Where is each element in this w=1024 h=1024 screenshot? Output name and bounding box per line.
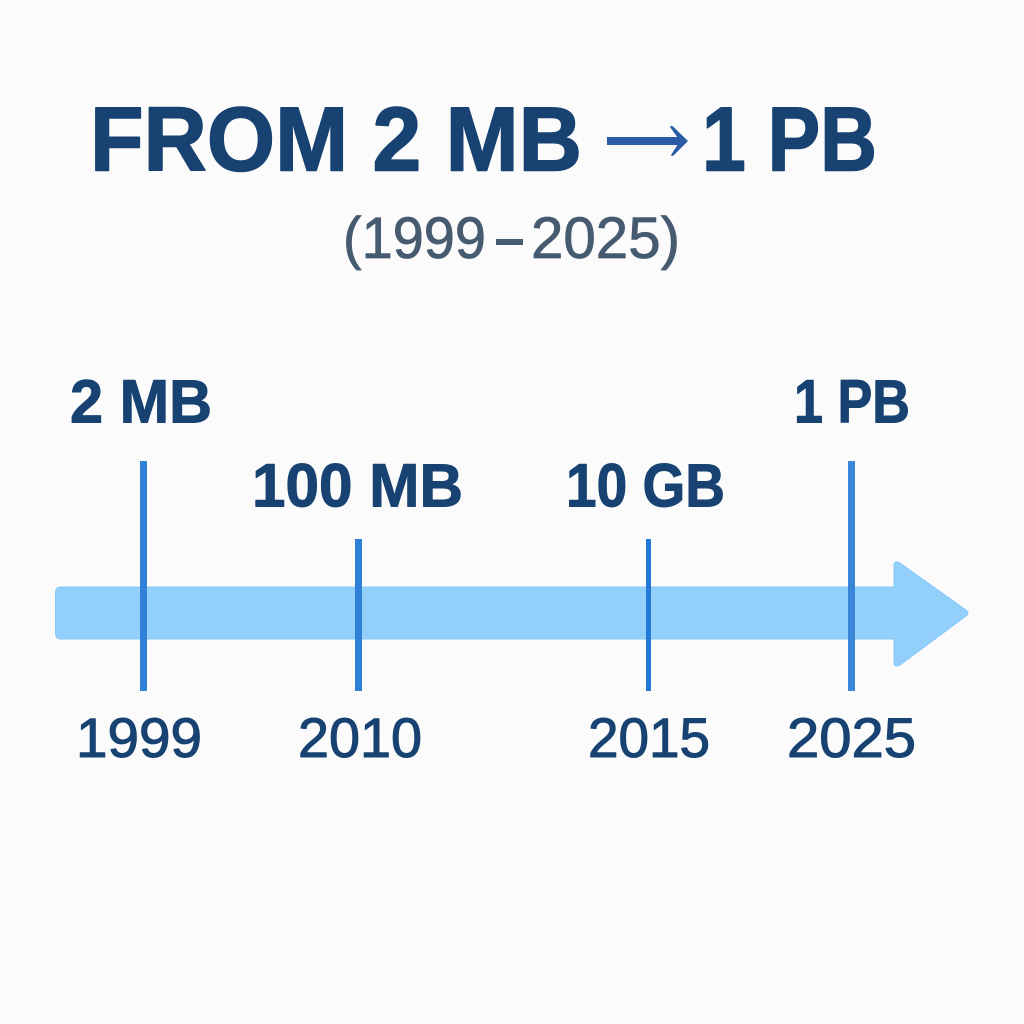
timeline arrow (56, 562, 968, 666)
tick: 2010 (355, 539, 362, 691)
subtitle (343, 206, 680, 271)
year label: 2025: 2025 (787, 706, 916, 769)
year label: 2010: 2010 (298, 706, 422, 769)
year label: 1999: 1999 (76, 706, 202, 769)
value label: 2 MB: 2 MB (70, 368, 212, 436)
year label: 2015: 2015 (588, 706, 710, 769)
tick: 2025 (848, 461, 855, 691)
title text: from: FROM 2 MB (90, 90, 582, 190)
milestone: 2025 (787, 368, 916, 769)
milestone: 2015 (566, 452, 725, 769)
tick: 2015 (646, 539, 651, 691)
title text: to: 1 PB (702, 90, 877, 190)
subtitle: (1999 (343, 206, 486, 271)
title (90, 90, 877, 190)
tick: 1999 (140, 461, 147, 691)
milestone: 1999 (70, 368, 212, 769)
milestone: 2010 (252, 452, 463, 769)
value label: 10 GB: 10 GB (566, 452, 725, 520)
value label: 100 MB: 100 MB (252, 452, 463, 520)
value label: 1 PB: 1 PB (794, 368, 910, 436)
subtitle: 2025) (531, 206, 680, 271)
icon: title arrow (607, 126, 688, 156)
